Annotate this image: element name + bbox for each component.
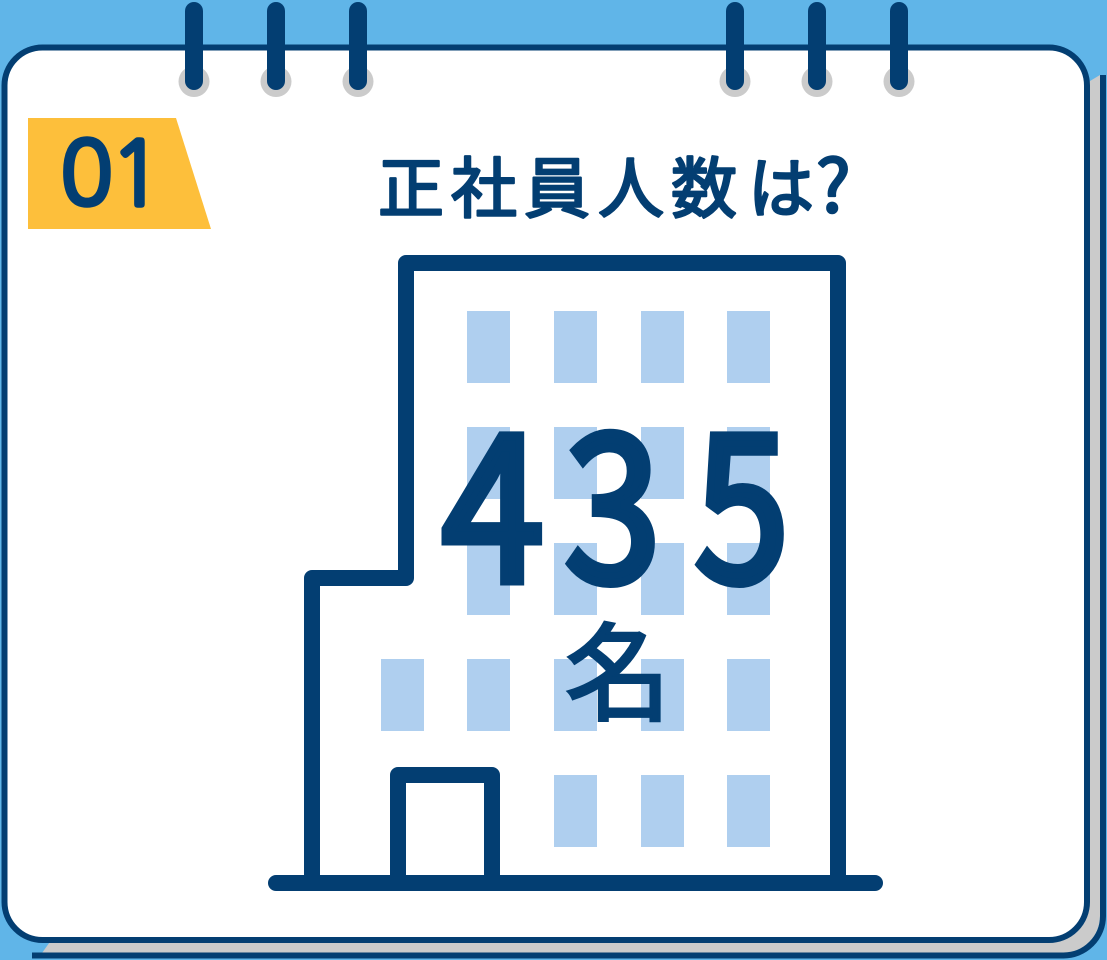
unit: 名: 名 xyxy=(565,589,671,743)
title: 正社員人数は xyxy=(378,136,814,232)
building outline xyxy=(276,263,875,883)
building windows xyxy=(381,311,770,847)
staff count: 435 xyxy=(442,352,789,639)
door xyxy=(398,775,492,883)
staff count: 435: 4 xyxy=(442,352,544,638)
number tag: 01 xyxy=(28,118,211,229)
staff count: 435: 5 xyxy=(695,352,789,639)
staff count: 435: 3 xyxy=(565,353,661,639)
binding rings xyxy=(178,11,914,97)
ground line xyxy=(276,875,875,891)
number tag: 01: 01 xyxy=(60,130,163,218)
title: ? xyxy=(816,128,851,234)
